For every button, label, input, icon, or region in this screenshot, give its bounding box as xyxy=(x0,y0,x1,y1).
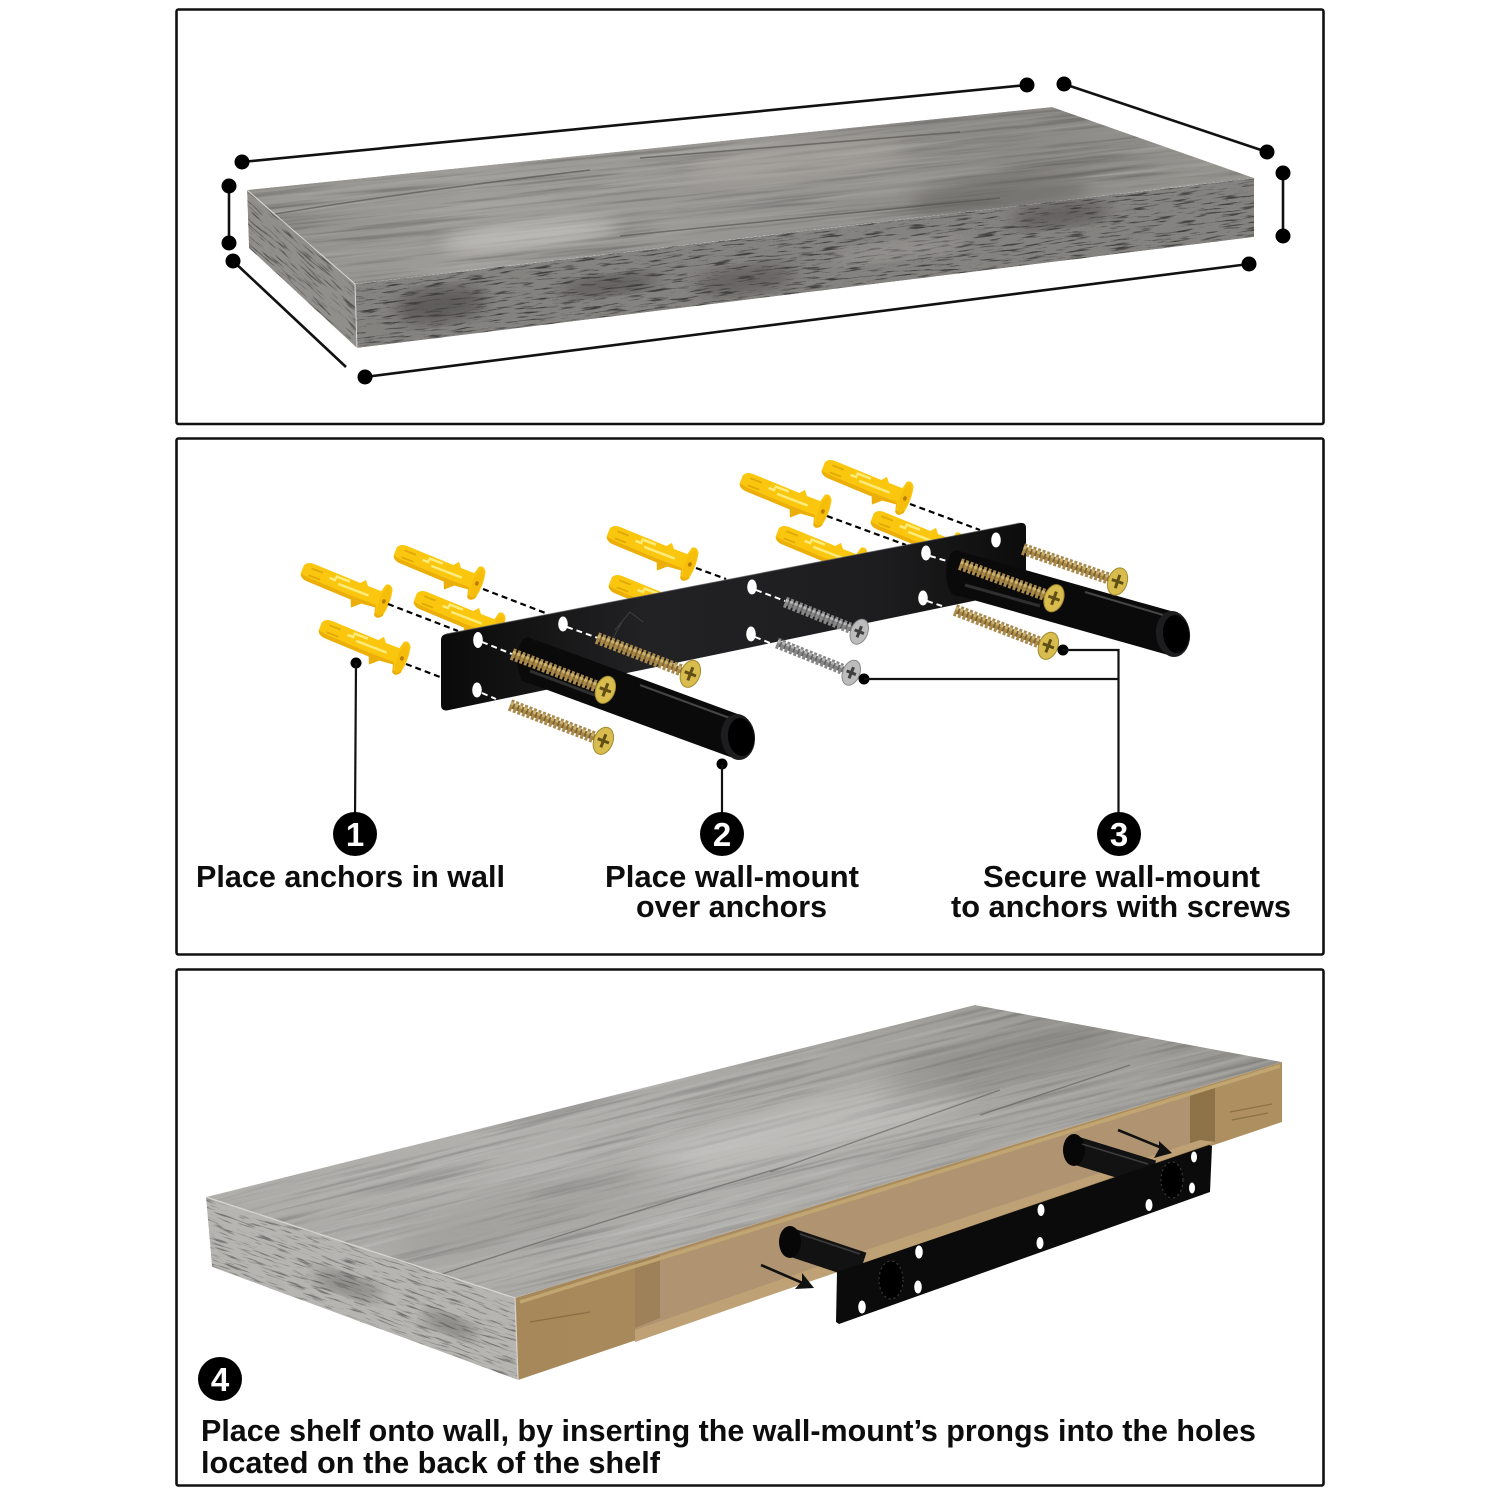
shelf: wood front face xyxy=(355,178,1254,348)
wall-mount bracket plate xyxy=(441,523,1026,710)
step 4 caption: Place shelf onto wall, by inserting the wall-mount’s prongs into the holes xyxy=(201,1413,1256,1448)
step 4 caption xyxy=(201,1413,1256,1480)
step 1 number badge xyxy=(333,812,377,856)
dimension line: left thickness xyxy=(222,178,236,250)
arrow: left prong insertion xyxy=(761,1265,814,1289)
step 4 number badge xyxy=(198,1357,242,1401)
left prong xyxy=(779,1226,862,1266)
arrow: right prong insertion xyxy=(1118,1130,1172,1158)
panel: shelf dimensions xyxy=(175,8,1325,426)
shelf: wood left side xyxy=(247,190,357,348)
panel: placing shelf on wall xyxy=(175,968,1325,1487)
step 4 number badge: 4 xyxy=(211,1361,230,1398)
wall-mount bracket plate xyxy=(836,1145,1212,1324)
step 2 number badge xyxy=(700,812,744,856)
anchors in front xyxy=(296,451,916,677)
step 1 number badge: 1 xyxy=(346,816,364,853)
step 2 caption xyxy=(605,859,859,924)
right prong xyxy=(1063,1134,1152,1174)
shelf: wood left side xyxy=(206,1197,518,1380)
step 3 caption xyxy=(951,859,1291,924)
step 2 caption: over anchors xyxy=(636,889,827,924)
panel: wall-mount steps xyxy=(176,438,1324,954)
step 2 number badge: 2 xyxy=(713,816,731,853)
dimension line: left depth xyxy=(226,254,346,367)
step 2 caption: Place wall-mount xyxy=(605,859,859,894)
shelf corner highlight xyxy=(206,1197,518,1380)
anchors behind the bracket xyxy=(409,502,965,648)
leader line: anchors to step 1 xyxy=(350,658,362,820)
white dashed guide lines on bracket xyxy=(482,556,960,699)
leader line: bracket to step 2 xyxy=(716,758,728,820)
dimension line: right depth xyxy=(1056,76,1274,160)
leader lines: screws to step 3 xyxy=(858,644,1118,820)
screws xyxy=(505,536,1131,757)
left prong tube xyxy=(517,637,757,762)
shelf: wood top face xyxy=(248,107,1254,284)
shelf: MDF back with recess xyxy=(515,1062,1282,1380)
step 4 caption: located on the back of the shelf xyxy=(201,1445,661,1480)
dimension line: right thickness xyxy=(1276,166,1290,244)
shelf: wood top face xyxy=(207,1005,1282,1298)
black dashed guide lines xyxy=(388,504,980,677)
dimension line: front length xyxy=(358,256,1256,384)
step 1 caption: Place anchors in wall xyxy=(196,859,505,894)
shelf highlight edge xyxy=(247,190,357,348)
step 3 number badge xyxy=(1097,812,1141,856)
step 3 caption: to anchors with screws xyxy=(951,889,1291,924)
step 3 number badge: 3 xyxy=(1110,816,1128,853)
step 3 caption: Secure wall-mount xyxy=(983,859,1260,894)
dimension line: back length xyxy=(234,78,1034,170)
right prong tube xyxy=(946,550,1192,659)
